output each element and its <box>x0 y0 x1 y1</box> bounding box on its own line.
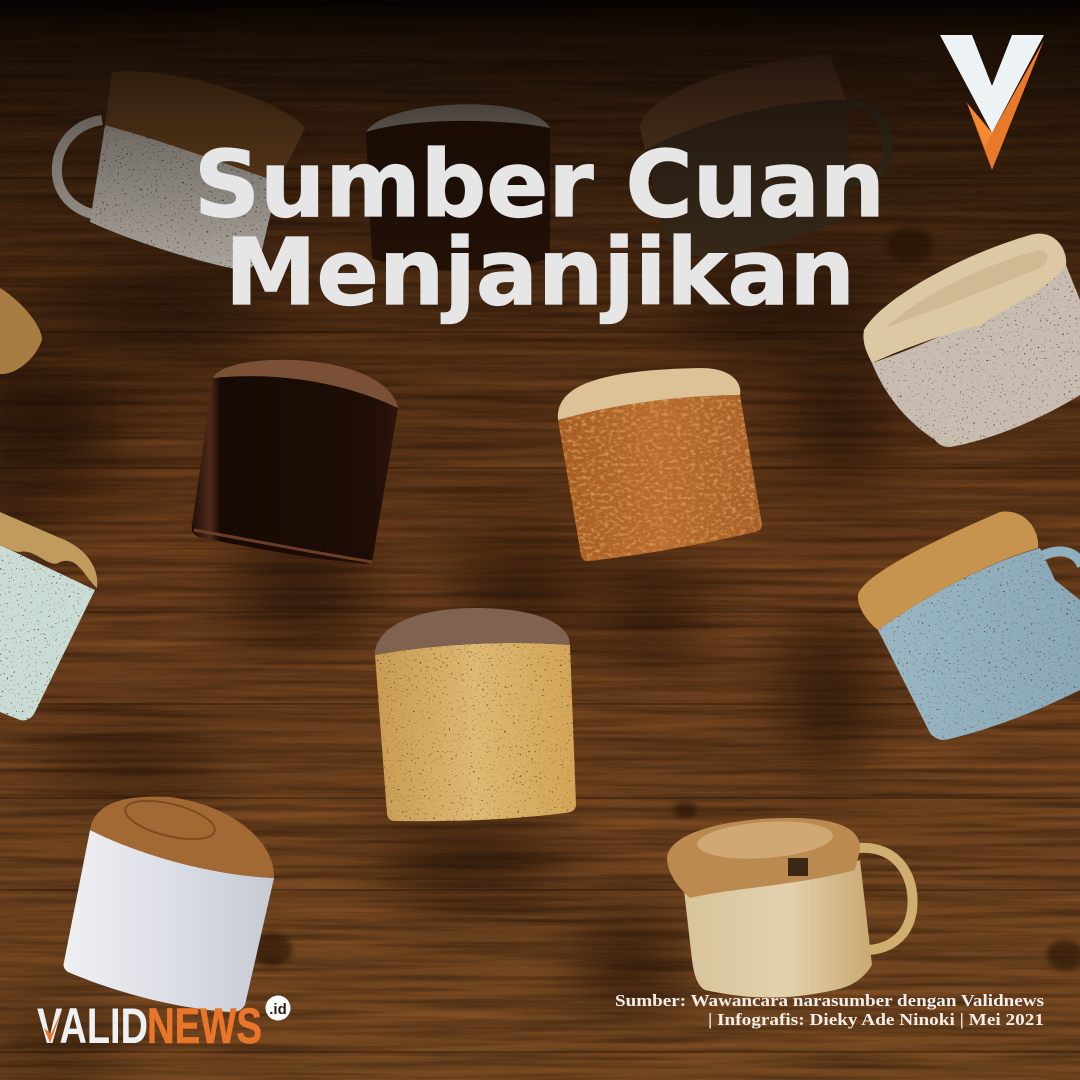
cup: orange terracotta <box>558 368 762 561</box>
source credit: | Infografis: Dieky Ade Ninoki | Mei 2021 <box>708 1010 1044 1029</box>
logo: V mark <box>940 35 1044 170</box>
source credit: Sumber: Wawancara narasumber dengan Validnews <box>615 991 1044 1010</box>
title: Menjanjikan <box>225 219 855 326</box>
cup: left pale mint <box>0 512 97 720</box>
cup: top-right dark <box>640 55 887 258</box>
logo: VALIDNEWS.id: .id <box>269 1001 287 1018</box>
cup: beige bottom-right <box>667 817 913 998</box>
logo: VALIDNEWS.id <box>37 996 290 1054</box>
source credit <box>615 991 1044 1029</box>
cup: top-centre dark <box>366 104 550 271</box>
cup: right blue <box>858 512 1080 740</box>
title: Sumber Cuan <box>194 131 885 238</box>
top dark overlay <box>0 0 1080 488</box>
logo: VALIDNEWS.id: VALID <box>37 998 148 1054</box>
logo: VALIDNEWS.id: NEWS <box>147 998 262 1054</box>
cup: dark glazed <box>192 360 398 564</box>
cup: white bottom-left <box>64 793 274 1012</box>
side shade <box>0 320 50 560</box>
cup: right speckled white <box>863 234 1080 447</box>
cup shadows <box>0 270 890 1075</box>
title <box>194 131 885 326</box>
cup: yellow centre <box>375 608 576 821</box>
cup: left edge clipped <box>0 288 42 374</box>
cup: top-left speckled white <box>57 71 305 270</box>
